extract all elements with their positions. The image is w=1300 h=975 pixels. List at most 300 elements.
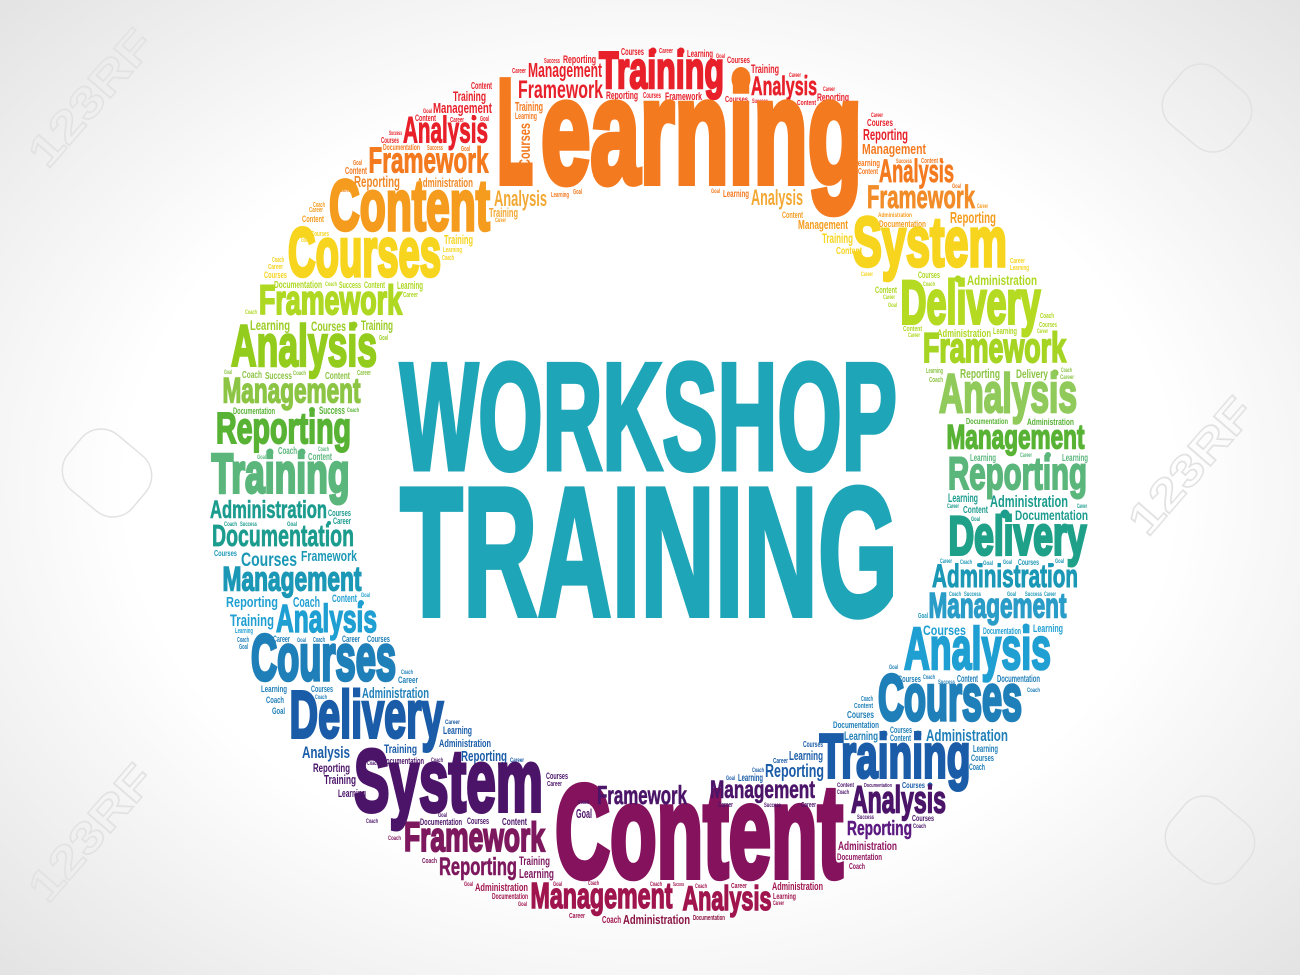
word ring: cyan band: Goal <box>918 613 928 620</box>
word: Reporting: Reporting <box>439 853 517 881</box>
word ring: crimson band: Success <box>673 882 684 888</box>
word ring: blue band: Goal <box>272 706 285 716</box>
word ring: lime band: Career <box>1037 329 1048 335</box>
word ring: amber band: Content <box>782 210 803 220</box>
word ring: cyan band: Courses <box>241 550 297 571</box>
word: Management: Management <box>928 586 1067 626</box>
word ring: purple band: Courses <box>467 816 489 826</box>
word ring: cyan band: Framework <box>301 548 357 565</box>
word ring: royal blue band: Goal <box>726 776 735 782</box>
word ring: amber band: Content <box>302 214 324 224</box>
word: Delivery: Delivery <box>900 268 1041 336</box>
word: Analysis: Analysis <box>231 314 377 379</box>
word ring: sky blue band: Goal <box>361 593 370 599</box>
word: Documentation: Documentation <box>212 518 354 553</box>
word ring: blue band: Courses <box>367 634 390 644</box>
word ring: red band: Reporting <box>606 90 638 102</box>
word ring: amber band: Analysis <box>751 185 803 210</box>
word ring: crimson band: Coach <box>602 915 621 926</box>
word ring: crimson band: Learning <box>773 892 796 901</box>
word ring: light green band: Goal <box>224 370 232 376</box>
word ring: plum band: Coach <box>849 862 865 871</box>
word ring: red band: Success <box>389 131 402 137</box>
word ring: blue band: Goal <box>297 638 306 644</box>
word ring: royal blue band: Learning <box>738 773 763 784</box>
word ring: blue band: Documentation <box>833 720 879 730</box>
word ring: lime band: Coach <box>325 282 337 288</box>
word ring: light green band: Content <box>325 371 350 382</box>
word ring: crimson band <box>464 875 823 927</box>
word ring: teal band: Career <box>947 504 959 510</box>
word ring: blue band: Coach <box>1027 688 1040 694</box>
word ring: red band: Courses <box>643 91 661 100</box>
word: Administration: Administration <box>932 558 1078 594</box>
word ring: cyan band: Goal <box>983 561 993 567</box>
word ring: light green band: Success <box>265 371 292 382</box>
word ring: crimson band: Coach <box>588 881 599 887</box>
word ring: teal band <box>210 491 1088 566</box>
word ring: blue band: Coach <box>923 675 935 681</box>
word ring: sea green band: Career <box>1020 453 1032 459</box>
word ring: orange band: Success <box>427 145 443 152</box>
word: Courses: Courses <box>288 214 441 291</box>
word ring: light green band: Career <box>1060 375 1074 381</box>
word ring: plum band: Training <box>519 854 550 868</box>
word ring: crimson band: Administration <box>772 881 823 893</box>
word ring: blue band: Career <box>342 634 360 644</box>
word ring: orange band: Success <box>896 159 912 165</box>
word ring: orange band: Content <box>858 167 878 176</box>
word ring: royal blue band: Courses <box>902 781 925 790</box>
word ring: lime band: Goal <box>888 303 897 309</box>
word ring: red band: Content <box>415 113 436 123</box>
word: Training: Training <box>212 442 350 504</box>
word ring: lime band: Administration <box>937 328 991 340</box>
word ring: lime band <box>231 268 1066 379</box>
word ring: teal band: Administration <box>990 492 1068 511</box>
word ring: orange band: Reporting <box>354 174 400 191</box>
word ring: orange band: Goal <box>353 160 362 167</box>
word ring: blue band: Courses <box>311 684 333 694</box>
word ring: red band: Success <box>752 99 768 105</box>
word ring: purple band: Coach <box>578 800 589 806</box>
word ring: lime band: Content <box>903 326 922 333</box>
word ring: lime band: Content <box>875 285 897 295</box>
word ring: royal blue band: Reporting <box>765 761 824 781</box>
word ring: teal band: Career <box>333 516 351 526</box>
word ring: yellow band: Training <box>822 230 853 246</box>
word ring: purple band: Coach <box>837 790 849 796</box>
word ring: orange band: Goal <box>711 189 720 195</box>
word ring: blue band: Career <box>273 634 290 644</box>
word ring: red band: Career <box>823 87 835 93</box>
word ring: yellow band: Coach <box>272 257 284 264</box>
word ring: sky blue band: Content <box>332 593 357 605</box>
word ring: amber band: Career <box>309 207 323 214</box>
word ring: lime band: Courses <box>1039 322 1057 329</box>
word ring: crimson band: Documentation <box>693 915 725 922</box>
word ring: orange band: Documentation <box>383 143 420 152</box>
word ring: green band: Success <box>319 405 345 417</box>
word ring: red band: Management <box>528 60 602 82</box>
word: Management: Management <box>530 875 673 916</box>
word ring: purple band: Reporting <box>847 818 912 840</box>
title: Workshop Training <box>400 332 898 654</box>
word ring: royal blue band: Career <box>510 758 524 764</box>
word ring: cyan band: Success <box>964 592 981 598</box>
word ring: light green band: Coach <box>929 377 943 384</box>
word: Delivery: Delivery <box>948 504 1087 566</box>
word ring: royal blue band: Career <box>773 758 788 765</box>
word: Content: Content <box>329 167 490 246</box>
word: Training: Training <box>599 42 724 100</box>
word: Analysis: Analysis <box>879 153 954 189</box>
word ring: orange band: Content <box>921 158 938 165</box>
word ring: amber band: Administration <box>878 213 912 219</box>
word ring: orange band: Goal <box>952 184 961 190</box>
word ring: lime band: Administration <box>967 272 1037 288</box>
word ring: cyan band <box>214 548 1078 626</box>
word ring: yellow band: Content <box>836 246 862 257</box>
word ring: sea green band: Coach <box>318 447 329 453</box>
word ring: lime band: Success <box>339 280 361 290</box>
word ring: purple band: Documentation <box>382 756 424 766</box>
word: System: System <box>853 203 1007 281</box>
word ring: red band: Courses <box>867 118 893 129</box>
word ring: cyan band: Career <box>1044 592 1056 598</box>
word ring: crimson band: Career <box>569 913 585 920</box>
word ring: purple band: Content <box>502 817 527 828</box>
word ring: lime band: Content <box>364 280 385 290</box>
word ring: orange band: Learning <box>515 111 537 121</box>
word ring: crimson band: Goal <box>464 882 473 888</box>
word ring: royal blue band <box>290 678 970 792</box>
word ring: cyan band: Courses <box>214 549 237 558</box>
word ring: sea green band <box>212 442 1088 504</box>
word ring: lime band: Coach <box>245 310 257 316</box>
word ring: crimson band: Administration <box>623 912 690 927</box>
word ring: lime band: Goal <box>379 335 388 342</box>
word ring: crimson band: Coach <box>650 882 662 888</box>
word ring: amber band: Training <box>489 205 518 220</box>
watermarks: 123RF <box>19 755 164 912</box>
word ring: royal blue band: Reporting <box>461 748 507 765</box>
word ring: purple band: Documentation <box>864 783 892 789</box>
word ring: sea green band: Coach <box>278 446 297 457</box>
word ring: teal band: Goal <box>287 522 297 528</box>
word: Delivery: Delivery <box>290 678 444 752</box>
word ring: blue band: Goal <box>239 644 248 651</box>
word ring: lime band: Training <box>361 317 393 333</box>
word ring: red band: Content <box>797 100 816 107</box>
word ring: sky blue band: Training <box>230 611 274 630</box>
watermarks: 123RF <box>19 20 164 177</box>
word ring: red band: Reporting <box>563 54 596 66</box>
word ring: purple band: Training <box>324 772 356 787</box>
word ring: lime band: Learning <box>397 280 423 292</box>
word ring: crimson band: Documentation <box>492 892 528 901</box>
word ring: red band <box>381 42 908 150</box>
word ring: orange band: Goal <box>573 189 582 196</box>
word: Management: Management <box>222 560 362 598</box>
word: Management: Management <box>222 372 361 410</box>
word ring: purple band: Coach <box>431 758 443 764</box>
word ring: light green band: Reporting <box>960 366 1000 381</box>
word: Framework: Framework <box>404 814 545 860</box>
title line: TRAINING: TRAINING <box>400 448 898 654</box>
word ring: purple band: Courses <box>546 771 568 781</box>
word ring: red band: Success <box>544 58 560 65</box>
word ring: cyan band: Success <box>1025 592 1042 598</box>
word ring: red band: Courses <box>725 95 748 104</box>
word: Courses: Courses <box>251 621 396 694</box>
word ring: green band <box>216 404 1084 456</box>
word ring: light green band: Coach <box>242 370 262 381</box>
word ring: yellow band <box>264 203 1029 291</box>
word ring: teal band: Goal <box>971 517 980 523</box>
word ring: red band: Content <box>471 81 492 92</box>
word ring: blue band: Courses <box>890 725 912 735</box>
word ring: royal blue band: Coach <box>752 768 764 774</box>
word: Analysis: Analysis <box>904 616 1051 682</box>
word ring: sea green band: Learning <box>1062 453 1088 464</box>
word ring: sky blue band: Learning <box>1033 623 1063 635</box>
word ring: royal blue band: Learning <box>789 748 823 763</box>
word ring: blue band: Coach <box>266 695 284 705</box>
word ring: orange band: Learning <box>723 189 749 200</box>
word ring: red band: Career <box>512 68 526 75</box>
word ring: lime band: Courses <box>918 270 940 280</box>
word ring: teal band: Content <box>963 505 988 516</box>
word: Framework: Framework <box>597 780 687 810</box>
word ring: light green band: Coach <box>293 371 306 377</box>
word ring: lime band: Career <box>908 333 920 339</box>
word ring: purple band: Success <box>857 815 874 821</box>
word ring: crimson band: Goal <box>518 902 527 908</box>
word ring: red band: Goal <box>423 109 432 115</box>
word: Administration: Administration <box>210 496 327 524</box>
icon: large dot <box>732 67 750 91</box>
word: Framework: Framework <box>923 324 1066 371</box>
word ring: crimson band: Goal <box>553 882 562 888</box>
word ring: orange band <box>340 50 961 214</box>
word ring: red band: Management <box>433 100 492 117</box>
word ring: teal band: Coach <box>224 522 237 528</box>
word ring: blue band: Success <box>938 680 955 686</box>
word ring: cyan band: Goal <box>1055 559 1064 565</box>
word ring: amber band: Analysis <box>494 186 547 211</box>
word ring: yellow band: Courses <box>264 270 287 280</box>
word ring: sky blue band <box>226 593 1063 682</box>
word ring: lime band: Learning <box>250 317 290 333</box>
word ring: blue band: Career <box>398 675 418 685</box>
word: Analysis: Analysis <box>276 598 377 641</box>
word ring: orange band: Management <box>862 141 926 158</box>
word ring: teal band: Success <box>240 522 257 528</box>
word ring: purple band: Courses <box>912 814 934 823</box>
word ring: lime band: Coach <box>1040 313 1054 320</box>
word ring: royal blue band: Administration <box>439 738 491 750</box>
word ring: purple band <box>313 731 946 840</box>
word ring: red band: Training <box>751 62 779 76</box>
word: Courses: Courses <box>878 661 1022 734</box>
word ring: lime band: Career <box>403 292 418 299</box>
word ring: royal blue band: Training <box>384 742 417 756</box>
word ring: red band: Career <box>871 113 883 119</box>
word ring: blue band: Learning <box>261 684 287 694</box>
word ring: red band: Framework <box>518 76 603 104</box>
word ring: sky blue band: Coach <box>293 594 320 611</box>
word ring: blue band: Courses <box>898 674 921 684</box>
word ring: sky blue band: Learning <box>235 628 253 635</box>
word ring: light green band: Career <box>357 370 371 377</box>
word ring: yellow band: Learning <box>443 247 462 254</box>
word: Analysis: Analysis <box>939 362 1077 424</box>
word ring: red band: Goal <box>480 116 489 123</box>
word ring: teal band: Learning <box>948 491 978 505</box>
word ring: plum band: Administration <box>838 839 897 853</box>
word ring: lime band: Coach <box>923 282 935 288</box>
word ring: blue band: Coach <box>313 637 325 644</box>
word ring: teal band: Courses <box>328 508 351 518</box>
word ring: blue band: Goal <box>889 665 898 671</box>
word ring: plum band <box>388 758 897 905</box>
word ring: royal blue band: Courses <box>803 740 823 749</box>
word ring: blue band: Administration <box>362 685 429 702</box>
word ring: orange band: Courses <box>517 123 534 167</box>
word ring: orange band: Training <box>515 99 543 114</box>
word ring: orange band: Goal <box>461 146 470 153</box>
word ring: sea green band: Goal <box>257 455 266 461</box>
word ring: yellow band: Training <box>444 232 473 247</box>
word ring: red band: Framework <box>665 91 703 103</box>
word: Analysis: Analysis <box>403 110 488 150</box>
word ring: sky blue band: Documentation <box>983 626 1021 636</box>
word ring: red band: Career <box>659 48 673 55</box>
word ring: yellow band: Career <box>861 272 873 278</box>
word ring: royal blue band: Learning <box>443 725 472 737</box>
word ring: orange band: Learning <box>854 158 880 168</box>
word ring: red band: Courses <box>621 47 644 58</box>
word ring: cyan band: Goal <box>1003 560 1012 566</box>
word ring: amber band <box>302 167 996 246</box>
word ring: blue band: Courses <box>971 753 994 763</box>
word ring: sea green band: Learning <box>970 453 996 464</box>
word: Framework: Framework <box>368 140 489 180</box>
word: Reporting: Reporting <box>216 404 351 453</box>
word ring: yellow band: Career <box>1010 258 1025 265</box>
word ring: amber band: Management <box>798 217 848 232</box>
word: Management: Management <box>710 776 815 804</box>
word ring: lime band: Documentation <box>274 280 322 291</box>
word ring: purple band: Reporting <box>313 761 350 775</box>
word ring: purple band: Content <box>837 783 854 789</box>
word ring: amber band: Reporting <box>950 210 996 227</box>
word ring: royal blue band: Analysis <box>302 743 350 762</box>
word ring: yellow band: Coach <box>442 255 454 262</box>
word ring: crimson band: Administration <box>475 882 528 894</box>
word ring: purple band: Coach <box>366 819 378 825</box>
word ring: red band: Reporting <box>863 127 908 144</box>
word: Framework: Framework <box>259 277 402 323</box>
word ring: yellow band: Courses <box>311 231 329 238</box>
word: Management: Management <box>946 418 1084 456</box>
word ring: blue band: Administration <box>926 726 1008 745</box>
title line: WORKSHOP: WORKSHOP <box>400 332 897 502</box>
word ring: red band: Career <box>789 73 801 79</box>
word ring: purple band: Career <box>547 781 562 788</box>
word ring: purple band: Coach <box>367 761 379 767</box>
word ring: blue band: Courses <box>847 710 874 721</box>
word ring: amber band: Coach <box>313 202 325 209</box>
word ring: plum band: Coach <box>422 858 437 865</box>
word ring: plum band: Learning <box>519 866 554 881</box>
word ring: amber band: Career <box>977 204 988 210</box>
word ring: royal blue band: Career <box>445 720 461 726</box>
word ring: lime band: Courses <box>311 318 346 334</box>
word ring: purple band: Success <box>764 803 781 809</box>
word ring: cyan band: Career <box>940 559 952 565</box>
word ring: red band: Career <box>450 117 464 124</box>
word: Learning: earning <box>541 50 862 214</box>
word ring: purple band: Goal <box>576 806 592 821</box>
word ring: blue band: Coach <box>401 670 413 676</box>
word: Learning: L <box>497 50 533 214</box>
word ring: sky blue band: Reporting <box>226 594 278 611</box>
word ring: green band: Documentation <box>966 417 1008 426</box>
word ring: purple band: Career <box>801 802 816 809</box>
word ring: green band: Administration <box>1027 417 1074 427</box>
word ring: blue band: Content <box>957 674 978 685</box>
word ring: blue band: Learning <box>844 729 878 743</box>
word ring: blue band: Coach <box>969 762 985 772</box>
word ring: sky blue band: Courses <box>923 622 966 638</box>
word ring: blue band: Learning <box>973 744 998 755</box>
word ring: teal band: Career <box>1077 504 1087 510</box>
word ring: blue band: Documentation <box>997 674 1040 685</box>
word ring: sea green band: Content <box>308 452 332 463</box>
watermarks: 123RF <box>1119 388 1264 545</box>
word ring: yellow band: Career <box>268 264 283 271</box>
word: Analysis: Analysis <box>682 880 772 918</box>
word ring: purple band: Goal <box>438 813 447 819</box>
word: Analysis: Analysis <box>751 71 817 101</box>
word ring: light green band: Delivery <box>1016 367 1048 381</box>
word ring: green band: Documentation <box>233 406 275 416</box>
word ring: blue band: Coach <box>237 637 249 644</box>
word ring: red band: Training <box>453 88 486 104</box>
word ring: yellow band: Learning <box>1010 265 1029 272</box>
word ring: orange band: Administration <box>417 175 473 190</box>
word ring: cyan band: Coach <box>960 560 972 566</box>
word ring: red band: Courses <box>381 136 399 145</box>
word: Learning <box>497 50 862 214</box>
word ring: orange band: Learning <box>551 192 569 199</box>
word ring: cyan band: Coach <box>949 592 961 598</box>
word ring: cyan band: Goal <box>1007 592 1016 598</box>
word ring: orange band: Content <box>345 166 367 177</box>
word ring: red band: Reporting <box>817 92 849 104</box>
word ring: crimson band: Career <box>773 901 784 907</box>
word ring: amber band: Career <box>495 218 506 224</box>
word ring: blue band: Coach <box>315 695 327 701</box>
word ring: light green band: Coach <box>1061 368 1072 374</box>
word ring: purple band: Learning <box>338 788 366 800</box>
word ring: lime band: Learning <box>993 326 1017 336</box>
word: Content: Content <box>555 758 843 905</box>
word ring: orange band: Career <box>340 188 352 194</box>
word ring: light green band <box>222 362 1077 424</box>
